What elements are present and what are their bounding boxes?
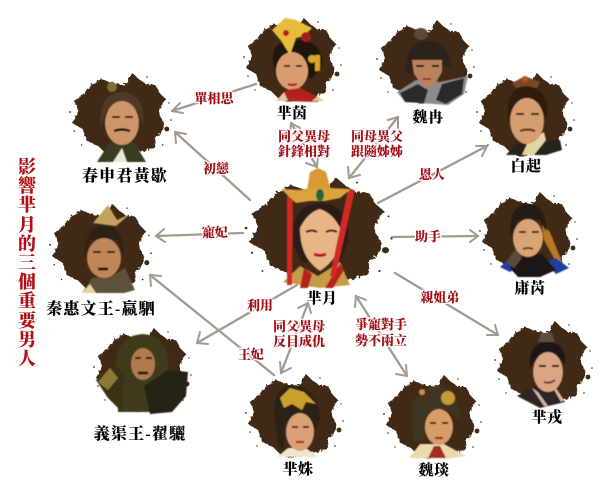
arrow: 初戀 [175,132,250,200]
portrait: 白起 [476,73,575,175]
title: 月 [18,215,36,235]
name: 魏琰: 魏琰 [418,461,450,479]
title: 三 [18,253,36,273]
portrait: 春申君黃歇 [69,73,172,185]
label: 同父異母 針鋒相對: 針鋒相對 [278,144,331,159]
arrow: 恩人 [378,146,487,203]
title [18,157,38,369]
title: 影 [18,157,36,177]
name: 芈月: 芈月 [306,290,338,307]
name: 春申君黃歇: 春申君黃歇 [82,166,168,185]
portrait: 義渠王-翟驪 [93,328,192,443]
portrait: 芈戎 [494,321,593,426]
label: 王妃: 王妃 [238,347,264,362]
label: 單相思: 單相思 [194,91,235,106]
label: 同父異母 反目成仇 [273,319,325,349]
arrow: 助手 [392,230,478,242]
title: 的 [18,234,36,254]
portrait: 芈姝 [245,374,344,478]
label: 同父異母 針鋒相對: 同父異母 [278,129,330,145]
name: 魏冉: 魏冉 [412,108,444,126]
arrow: 單相思 [172,84,256,113]
label: 助手: 助手 [415,229,441,244]
portrait: 魏琰 [383,375,482,479]
label: 同父異母 針鋒相對 [278,129,331,159]
label: 同母異父 跟隨姊姊: 同母異父 [351,129,404,145]
title: 男 [18,330,36,350]
label: 爭寵對手 勢不兩立 [355,317,407,348]
title: 人 [18,349,36,369]
title: 芈 [18,195,36,215]
arrow: 親姐弟 [395,273,498,335]
arrow: 同父異母 針鋒相對 [290,123,318,167]
label: 初戀: 初戀 [203,161,230,176]
title: 重 [18,290,36,311]
arrow: 利用 [197,285,297,344]
label: 親姐弟: 親姐弟 [420,290,460,305]
label: 利用: 利用 [247,298,273,313]
portrait: 芈茵 [243,18,342,122]
portrait: 魏冉 [376,20,475,126]
portrait: 秦惠文王-嬴駟 [46,204,156,318]
name: 芈戎: 芈戎 [531,408,563,426]
title: 要 [18,310,38,331]
arrow: 寵妃 [156,229,243,242]
arrow: 爭寵對手 勢不兩立 [355,296,407,376]
arrow: 同母異父 跟隨姊姊 [348,117,398,178]
label: 恩人: 恩人 [419,167,445,182]
label: 同父異母 反目成仇: 反目成仇 [273,334,325,349]
label: 爭寵對手 勢不兩立: 爭寵對手 [355,317,407,332]
name: 芈茵: 芈茵 [276,104,308,122]
label: 同母異父 跟隨姊姊: 跟隨姊姊 [351,144,403,159]
label: 同父異母 反目成仇: 同父異母 [273,319,325,335]
label: 同母異父 跟隨姊姊 [351,129,404,159]
name: 白起: 白起 [510,157,542,175]
label: 爭寵對手 勢不兩立: 勢不兩立 [355,333,407,348]
title: 響 [18,175,36,196]
name: 義渠王-翟驪: 義渠王-翟驪 [94,424,186,443]
arrow: 同父異母 反目成仇 [280,303,311,373]
arrow: 王妃 [150,275,274,375]
label: 寵妃: 寵妃 [202,225,228,240]
name: 芈姝: 芈姝 [282,460,314,478]
portrait: 芈月 [245,168,393,307]
name: 庸芮: 庸芮 [514,279,546,297]
portrait: 庸芮 [479,192,578,297]
name: 秦惠文王-嬴駟: 秦惠文王-嬴駟 [46,299,156,318]
title: 個 [18,271,36,292]
